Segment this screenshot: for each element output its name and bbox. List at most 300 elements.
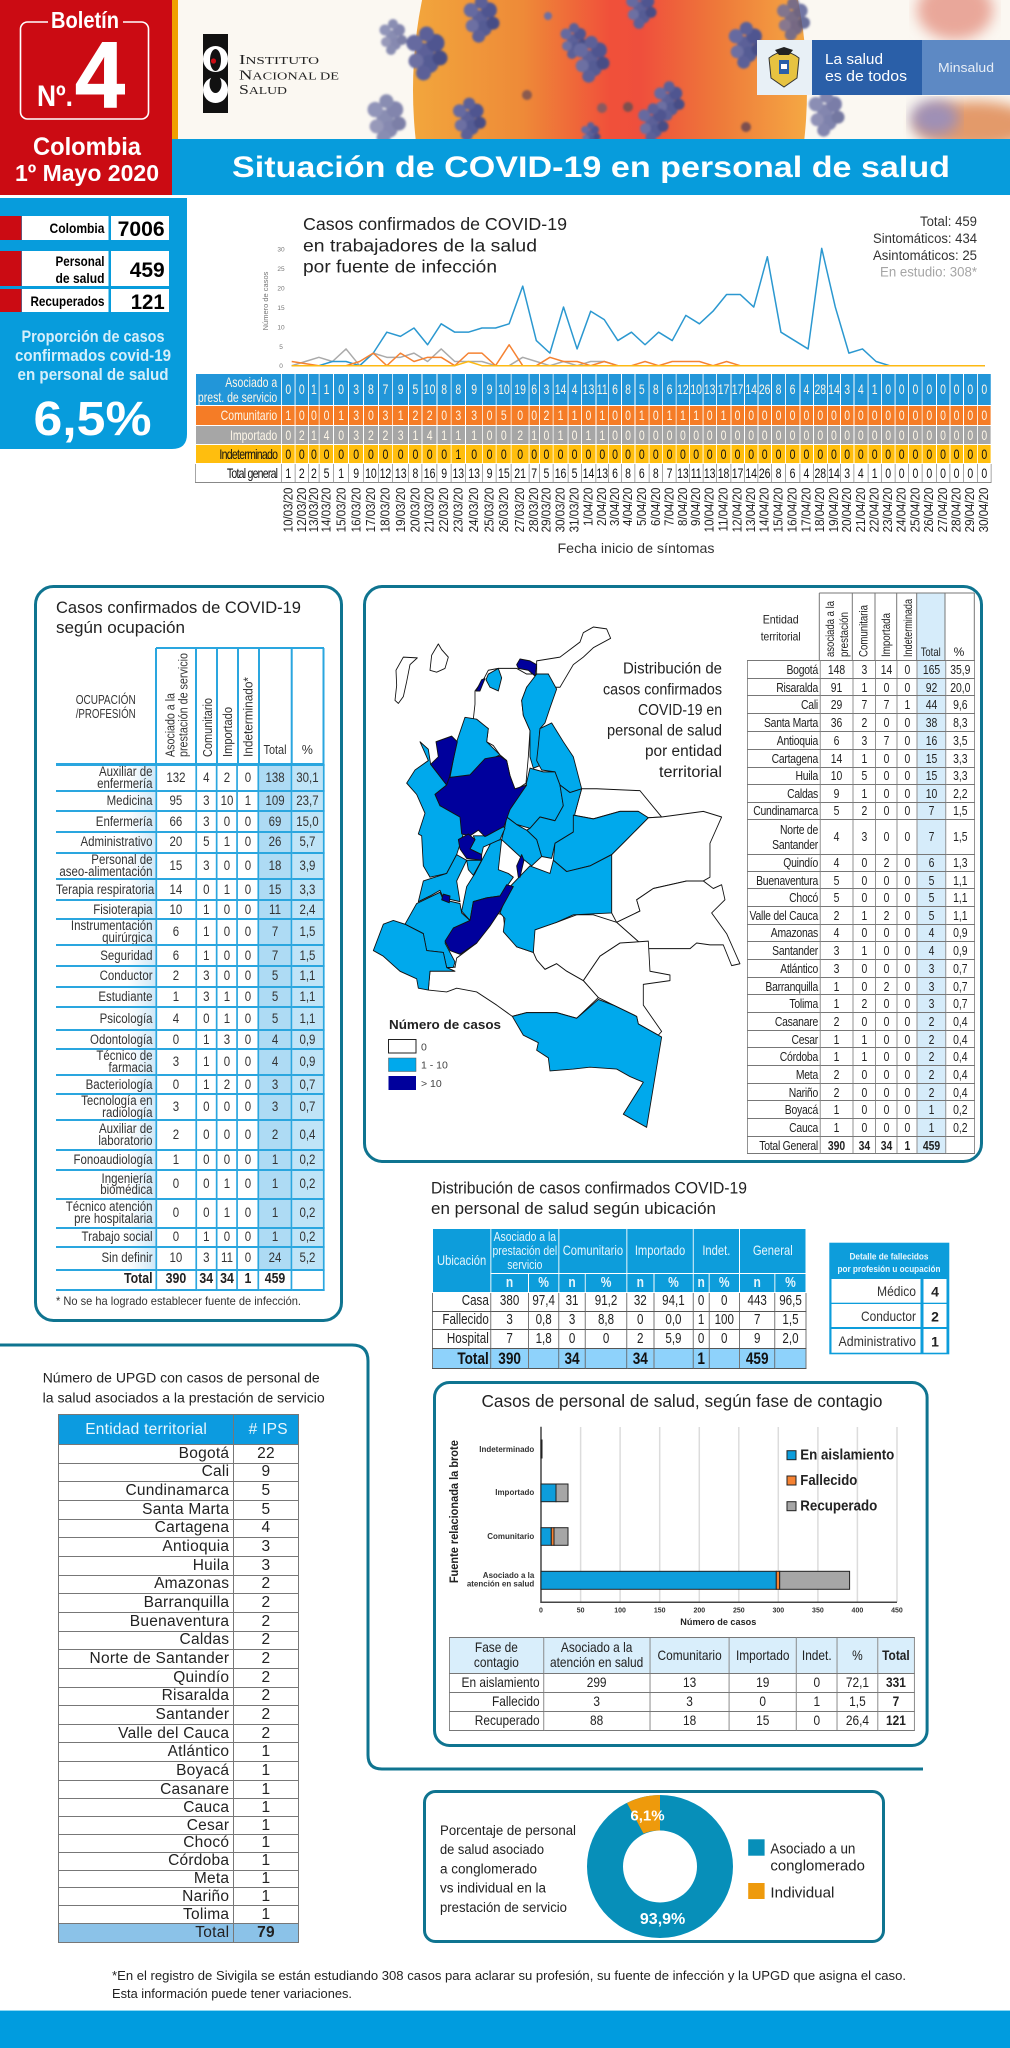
location table: 91,2 [595, 1293, 617, 1309]
territorial entity table: 3 [928, 996, 934, 1011]
occupation table: 459 [265, 1271, 285, 1287]
territorial entity table: 5 [833, 890, 839, 905]
data table by source and date: 0 [913, 407, 918, 423]
territorial entity table: 459 [923, 1138, 940, 1153]
date labels: 25/04/20 [908, 487, 923, 532]
occupation table: 0 [173, 1229, 179, 1244]
UPGD table: Atlántico [168, 1743, 229, 1760]
UPGD table: 2 [262, 1575, 270, 1592]
UPGD table: 1 [262, 1781, 270, 1798]
UPGD table: 3 [262, 1538, 270, 1555]
territorial entity table: 0 [861, 873, 867, 888]
date labels: 11/04/20 [716, 487, 731, 531]
contagion phase table: 7 [893, 1693, 900, 1709]
location table: Importado [635, 1242, 685, 1258]
territorial entity table: 0 [883, 1085, 889, 1100]
panel: cluster vs individual donut [423, 1790, 885, 1943]
territorial entity table: 3 [833, 961, 839, 976]
territorial entity table: 1 [861, 786, 867, 801]
territorial entity table: 0 [883, 873, 889, 888]
data table by source and date: 1 [586, 426, 591, 442]
chart title: Casos confirmados de COVID-19 [303, 214, 567, 234]
data table by source and date: 9 [441, 464, 447, 480]
data table by source and date: 4 [804, 381, 809, 397]
location table: Asociado a la [494, 1229, 556, 1244]
territorial entity table: 1 [833, 996, 839, 1011]
data table by source and date: 8 [653, 381, 659, 397]
date labels: 10/04/20 [702, 487, 717, 532]
territorial entity table: 0,7 [953, 979, 967, 994]
stacked bar chart: Indeterminado [479, 1445, 534, 1454]
data table by source and date: 0 [913, 464, 918, 480]
data table by source and date: 0 [517, 446, 523, 462]
UPGD table: # IPS [249, 1421, 288, 1438]
occupation table: 0 [245, 882, 251, 897]
data table by source and date: 1 [398, 407, 404, 423]
location table: 1,5 [782, 1312, 799, 1328]
territorial entity table: Antioquia [776, 733, 818, 748]
territorial entity table: 0 [904, 1085, 910, 1100]
data table by source and date: 26 [759, 464, 771, 480]
data table by source and date: 0 [517, 407, 523, 423]
stat: Colombia: Colombia [50, 220, 105, 236]
data table by source and date: 0 [885, 407, 891, 423]
footnote [112, 1968, 906, 2001]
occupation table: Conductor [100, 968, 153, 983]
location table: General [753, 1242, 793, 1258]
data table by source and date: 0 [721, 426, 726, 442]
date labels: 15/03/20 [334, 487, 348, 532]
contagion phase table: 0 [814, 1712, 820, 1728]
data table by source and date: 0 [667, 426, 672, 442]
data table by source and date: 3 [353, 426, 359, 442]
territorial entity table: 1 [861, 908, 867, 923]
territorial entity table: 14 [880, 662, 892, 677]
territorial entity table: 0 [904, 768, 910, 783]
data table by source and date: 9 [353, 464, 359, 480]
data table by source and date: 0 [776, 407, 781, 423]
contagion phase table: 1,5 [849, 1693, 866, 1709]
date labels: 23/04/20 [881, 487, 895, 532]
occupation table: Total [124, 1271, 153, 1287]
territorial entity table: 4 [928, 925, 934, 940]
date labels: 5/04/20 [634, 487, 649, 526]
territorial entity table: Meta [796, 1067, 818, 1082]
data table by source and date: 0 [735, 446, 740, 462]
data table by source and date: 0 [926, 407, 932, 423]
occupation table: 10 [170, 902, 182, 917]
territorial table header: % [954, 645, 965, 659]
occupation table: quirúrgica [102, 930, 153, 945]
territorial entity table: 3,3 [953, 768, 967, 783]
table header: Importado [221, 707, 235, 757]
territorial entity table: 1 [833, 979, 839, 994]
occupation table: 3 [203, 858, 209, 873]
occupation table: Odontología [90, 1032, 153, 1047]
data table by source and date: 11 [597, 381, 608, 397]
occupation table: 0 [245, 1099, 251, 1114]
UPGD table: 1 [262, 1743, 270, 1760]
UPGD table: 1 [262, 1762, 270, 1779]
territorial entity table: Chocó [789, 890, 818, 905]
chart title: Casos de personal de salud, según fase de contagio [481, 1391, 882, 1411]
territorial entity table: 14 [830, 751, 842, 766]
data table by source and date: 0 [572, 426, 578, 442]
hero image: coronavirus illustration [178, 0, 1010, 139]
territorial entity table: Nariño [788, 1085, 818, 1100]
occupation table: 5 [272, 968, 278, 983]
footnote: *En el registro de Sivigila se están estudiando 308 casos para aclarar su profesión, su fuente de infección y la UPGD que asigna el caso. [112, 1968, 906, 1983]
territorial entity table: 2 [833, 1085, 839, 1100]
stacked bar chart: 0 [539, 1607, 543, 1614]
UPGD table: Quindío [173, 1669, 229, 1686]
footnote: Esta información puede tener variaciones. [112, 1986, 352, 2001]
occupation table: 0,2 [299, 1176, 315, 1191]
occupation table: 1 [203, 1032, 209, 1047]
territorial entity table: 4 [833, 925, 839, 940]
occupation table: 0 [224, 924, 230, 939]
data table by source and date: 1 [680, 407, 686, 423]
footer band [0, 2010, 1010, 2048]
data table by source and date: 1 [531, 426, 537, 442]
data table by source and date: 0 [338, 446, 344, 462]
occupation table: 1 [245, 793, 251, 808]
date labels: 15/04/20 [771, 487, 786, 532]
date labels: 1/04/20 [581, 487, 596, 526]
box: deaths by profession: Médico [877, 1283, 916, 1299]
data table by source and date: 0 [885, 446, 891, 462]
location table: % [601, 1274, 611, 1291]
occupation table: 0 [245, 814, 251, 829]
box: deaths by profession: Administrativo [838, 1333, 916, 1349]
occupation table: 3,9 [299, 858, 315, 873]
data table by source and date: 0 [899, 381, 905, 397]
y axis: 15 [277, 305, 285, 312]
data table by source and date: 0 [967, 464, 973, 480]
occupation table: 1 [203, 948, 209, 963]
occupation table: 3 [173, 1099, 179, 1114]
date labels: 29/03/20 [539, 487, 554, 532]
territorial entity table: Total General [759, 1138, 818, 1153]
panel: map by territorial entity [363, 585, 983, 1163]
territorial entity table: 0 [883, 829, 889, 844]
territorial entity table: 3 [861, 829, 867, 844]
data table by source and date: 14 [555, 381, 566, 397]
occupation table: 10 [170, 1250, 182, 1265]
data table by source and date: 0 [285, 426, 291, 442]
stat: Recuperados [0, 289, 169, 314]
stacked bar chart: 50 [576, 1607, 584, 1614]
occupation table: 0,7 [299, 1077, 315, 1092]
occupation table: Sin definir [102, 1250, 153, 1265]
date labels: 30/04/20 [977, 487, 991, 532]
occupation table: 2 [224, 770, 230, 785]
data table by source and date: 15 [498, 464, 510, 480]
data table by source and date: 13 [596, 464, 608, 480]
occupation table: 0 [245, 1229, 251, 1244]
data table by source and date: 28 [814, 464, 826, 480]
UPGD table: 9 [262, 1463, 270, 1480]
logo: Instituto Nacional de Salud: N ACIONAL DE [239, 68, 339, 82]
territorial entity table: 5 [928, 890, 934, 905]
line chart [292, 248, 985, 366]
table header: Indeterminado* [242, 677, 256, 757]
stat: Recuperados: Recuperados [30, 293, 105, 309]
data table by source and date: 7 [667, 464, 672, 480]
date labels: 31/03/20 [567, 487, 582, 532]
location table: Fallecido [442, 1312, 489, 1328]
occupation table: 0 [203, 1011, 209, 1026]
date labels: 20/03/20 [408, 487, 423, 532]
logo: Instituto Nacional de Salud: SALUD [239, 82, 288, 97]
panel heading: según ocupación [56, 619, 185, 637]
occupation table: 1 [224, 882, 230, 897]
territorial table header: prestación [837, 612, 851, 657]
location table: Hospital [447, 1331, 489, 1347]
occupation table: 0 [224, 858, 230, 873]
data table by source and date: 0 [285, 381, 291, 397]
date labels: 2/04/20 [595, 487, 609, 526]
data table by source and date: 0 [653, 407, 659, 423]
chart title [303, 214, 567, 277]
data table by source and date: 5 [324, 464, 329, 480]
data table by source and date: 0 [612, 446, 618, 462]
data table by source and date: 0 [954, 464, 960, 480]
occupation table: 0,4 [299, 1127, 315, 1142]
territorial entity table: 20,0 [950, 680, 970, 695]
data table by source and date: 0 [899, 464, 905, 480]
section heading [43, 1370, 325, 1406]
territorial entity table: 1 [904, 697, 910, 712]
territorial entity table: 0 [904, 925, 910, 940]
data table by source and date: 19 [514, 381, 526, 397]
data table by source and date: 10 [498, 381, 510, 397]
stacked bar chart: 300 [772, 1607, 784, 1614]
occupation table: 138 [265, 770, 285, 785]
territorial entity table: Buenaventura [756, 873, 818, 888]
UPGD table: Santa Marta [142, 1501, 229, 1518]
location table: 0 [637, 1312, 644, 1328]
territorial entity table: 0,2 [953, 1120, 967, 1135]
occupation table: 3 [272, 1077, 278, 1092]
data table by source and date: 1 [324, 381, 329, 397]
data table by source and date: 0 [967, 381, 973, 397]
data table by source and date: 0 [817, 446, 823, 462]
occupation table: 3 [224, 1032, 230, 1047]
date labels: 26/04/20 [922, 487, 936, 532]
occupation table: radiología [102, 1105, 153, 1120]
occupation table: Administrativo [80, 834, 153, 849]
data table by source and date: 0 [441, 446, 447, 462]
y axis: 20 [277, 286, 285, 292]
map legend: 1 - 10 [421, 1060, 448, 1072]
bar chart legend: Recuperado [800, 1499, 877, 1515]
territorial entity table: 0 [883, 1067, 889, 1082]
territorial entity table: 0,2 [953, 1102, 967, 1117]
occupation table: farmacia [109, 1060, 153, 1075]
territorial entity table: 0 [904, 1120, 910, 1135]
territorial entity table: Caldas [787, 786, 818, 801]
occupation table: 1 [272, 1229, 278, 1244]
occupation table: 0 [173, 1077, 179, 1092]
territorial entity table: 0 [904, 908, 910, 923]
occupation table: 1 [203, 924, 209, 939]
data table by source and date: 0 [748, 426, 754, 442]
date labels: 16/04/20 [785, 487, 800, 532]
red bulletin block: Colombia [33, 133, 142, 161]
stacked bar chart: Número de casos [680, 1617, 756, 1628]
location table: 3 [506, 1312, 513, 1328]
data table by source and date: 0 [885, 426, 891, 442]
box: deaths by profession: por profesión u ocupación [838, 1264, 941, 1275]
data table by source and date: 21 [514, 464, 526, 480]
table header: Comunitario [201, 698, 215, 757]
location table: 443 [747, 1293, 767, 1309]
territorial entity table: 6 [833, 733, 839, 748]
location table: 0 [603, 1331, 609, 1347]
occupation table: 1 [173, 989, 179, 1004]
UPGD table: 1 [262, 1852, 270, 1869]
occupation table: 4 [173, 1011, 179, 1026]
territorial entity table: 7 [883, 697, 889, 712]
data table by source and date: 0 [693, 426, 699, 442]
date labels: 12/04/20 [730, 487, 745, 532]
territorial entity table: 0 [883, 680, 889, 695]
data table by source and date: 14 [745, 381, 757, 397]
occupation table: enfermería [97, 776, 153, 791]
territorial entity table: 0 [904, 680, 910, 695]
occupation table: 1 [203, 1229, 209, 1244]
data table by source and date: 1 [412, 426, 418, 442]
box: deaths by profession: Conductor [861, 1308, 916, 1324]
territorial entity table: 0 [883, 1049, 889, 1064]
territorial entity table: 4 [928, 943, 934, 958]
table header: Asociado a la [164, 693, 178, 757]
territorial entity table: 0 [861, 1014, 867, 1029]
red bulletin block: Nº. [37, 80, 73, 113]
UPGD table: 1 [262, 1835, 270, 1851]
data table by source and date: 1 [455, 426, 461, 442]
data table by source and date: 0 [441, 407, 447, 423]
territorial entity table: 0 [861, 855, 867, 870]
data table by source and date: 0 [353, 446, 359, 462]
location table: n [506, 1274, 513, 1291]
data table by source and date: 4 [858, 464, 864, 480]
territorial entity table: 0 [904, 979, 910, 994]
stacked bar chart: 150 [654, 1607, 665, 1614]
UPGD table: Cartagena [155, 1519, 229, 1536]
donut legend: Asociado a un [770, 1841, 855, 1857]
location table: 0 [721, 1331, 727, 1347]
location table: 32 [634, 1293, 647, 1309]
occupation table: Auxiliar de [99, 1121, 153, 1136]
territorial entity table: 35,9 [950, 662, 970, 677]
territorial entity table: 5 [833, 873, 839, 888]
occupation table: 0 [224, 1054, 230, 1069]
data table by source and date: 0 [487, 446, 492, 462]
data table by source and date: 14 [828, 464, 840, 480]
data table by source and date: 0 [586, 446, 591, 462]
data table by source and date: 1 [558, 407, 563, 423]
occupation table: Terapia respiratoria [56, 882, 154, 897]
data table by source and date: 0 [707, 446, 713, 462]
data table by source and date: 13 [583, 381, 594, 397]
UPGD table: Nariño [182, 1888, 229, 1905]
data table by source and date: 8 [625, 381, 631, 397]
data table by source and date: 0 [831, 407, 837, 423]
data table by source and date: 0 [612, 407, 618, 423]
data table by source and date: 1 [338, 407, 344, 423]
UPGD table: Córdoba [168, 1852, 229, 1869]
location table: 3 [569, 1312, 575, 1328]
data table by source and date: 5 [412, 381, 418, 397]
chart title: por fuente de infección [303, 257, 497, 277]
territorial entity table: 0 [861, 1102, 867, 1117]
y axis: 0 [279, 363, 283, 370]
occupation table: 3 [203, 968, 209, 983]
territorial entity table: 10 [830, 768, 842, 783]
data table by source and date: 0 [776, 426, 781, 442]
title band [172, 139, 1010, 195]
data table by source and date: 0 [680, 446, 686, 462]
occupation table: aseo-alimentación [59, 864, 153, 879]
occupation table: 1 [224, 989, 230, 1004]
occupation table: 1 [203, 1077, 209, 1092]
territorial entity table: 36 [830, 715, 842, 730]
territorial entity table: Quindío [783, 855, 818, 870]
location table: 0 [569, 1331, 575, 1347]
data table by source and date: 0 [639, 426, 645, 442]
territorial entity table: 92 [925, 680, 937, 695]
data table by source and date: 6 [639, 464, 645, 480]
box: deaths by profession: 1 [931, 1334, 939, 1350]
totals summary: En estudio: 308* [880, 264, 978, 280]
data table by source and date: 14 [583, 464, 594, 480]
section heading [431, 1180, 747, 1218]
data table by source and date: 0 [981, 446, 987, 462]
territorial entity table: 3 [928, 961, 934, 976]
data table by source and date: 10 [365, 464, 377, 480]
location table: 0,8 [536, 1312, 552, 1328]
date labels: 23/03/20 [451, 487, 466, 532]
territorial entity table: 0 [904, 1102, 910, 1117]
occupation table: 3,3 [299, 882, 315, 897]
territorial entity table: 7 [928, 803, 934, 818]
territorial entity table: 0 [904, 733, 910, 748]
data table by source and date: 0 [817, 407, 823, 423]
territorial entity table: 0 [904, 996, 910, 1011]
donut legend [748, 1839, 865, 1902]
proportion text: en personal de salud [18, 366, 168, 384]
territorial entity table: 0 [883, 943, 889, 958]
occupation table: 1,1 [299, 1011, 315, 1026]
map legend: > 10 [421, 1078, 442, 1090]
contagion phase table: 0 [814, 1674, 820, 1690]
data table by source and date: 4 [858, 381, 864, 397]
location table: 8,8 [598, 1312, 614, 1328]
data table by source and date: 0 [885, 381, 891, 397]
occupation table: 30,1 [296, 770, 319, 785]
occupation table: 0 [224, 1099, 230, 1114]
data table by source and date: 0 [612, 426, 618, 442]
occupation table: 0 [245, 1250, 251, 1265]
territorial entity table: 0 [883, 751, 889, 766]
territorial entity table: 0,4 [953, 1049, 967, 1064]
box: deaths by profession: 4 [931, 1284, 939, 1300]
territorial entity table: 0 [883, 715, 889, 730]
stacked bar chart: 250 [733, 1607, 744, 1614]
data table by source and date: 13 [677, 464, 689, 480]
